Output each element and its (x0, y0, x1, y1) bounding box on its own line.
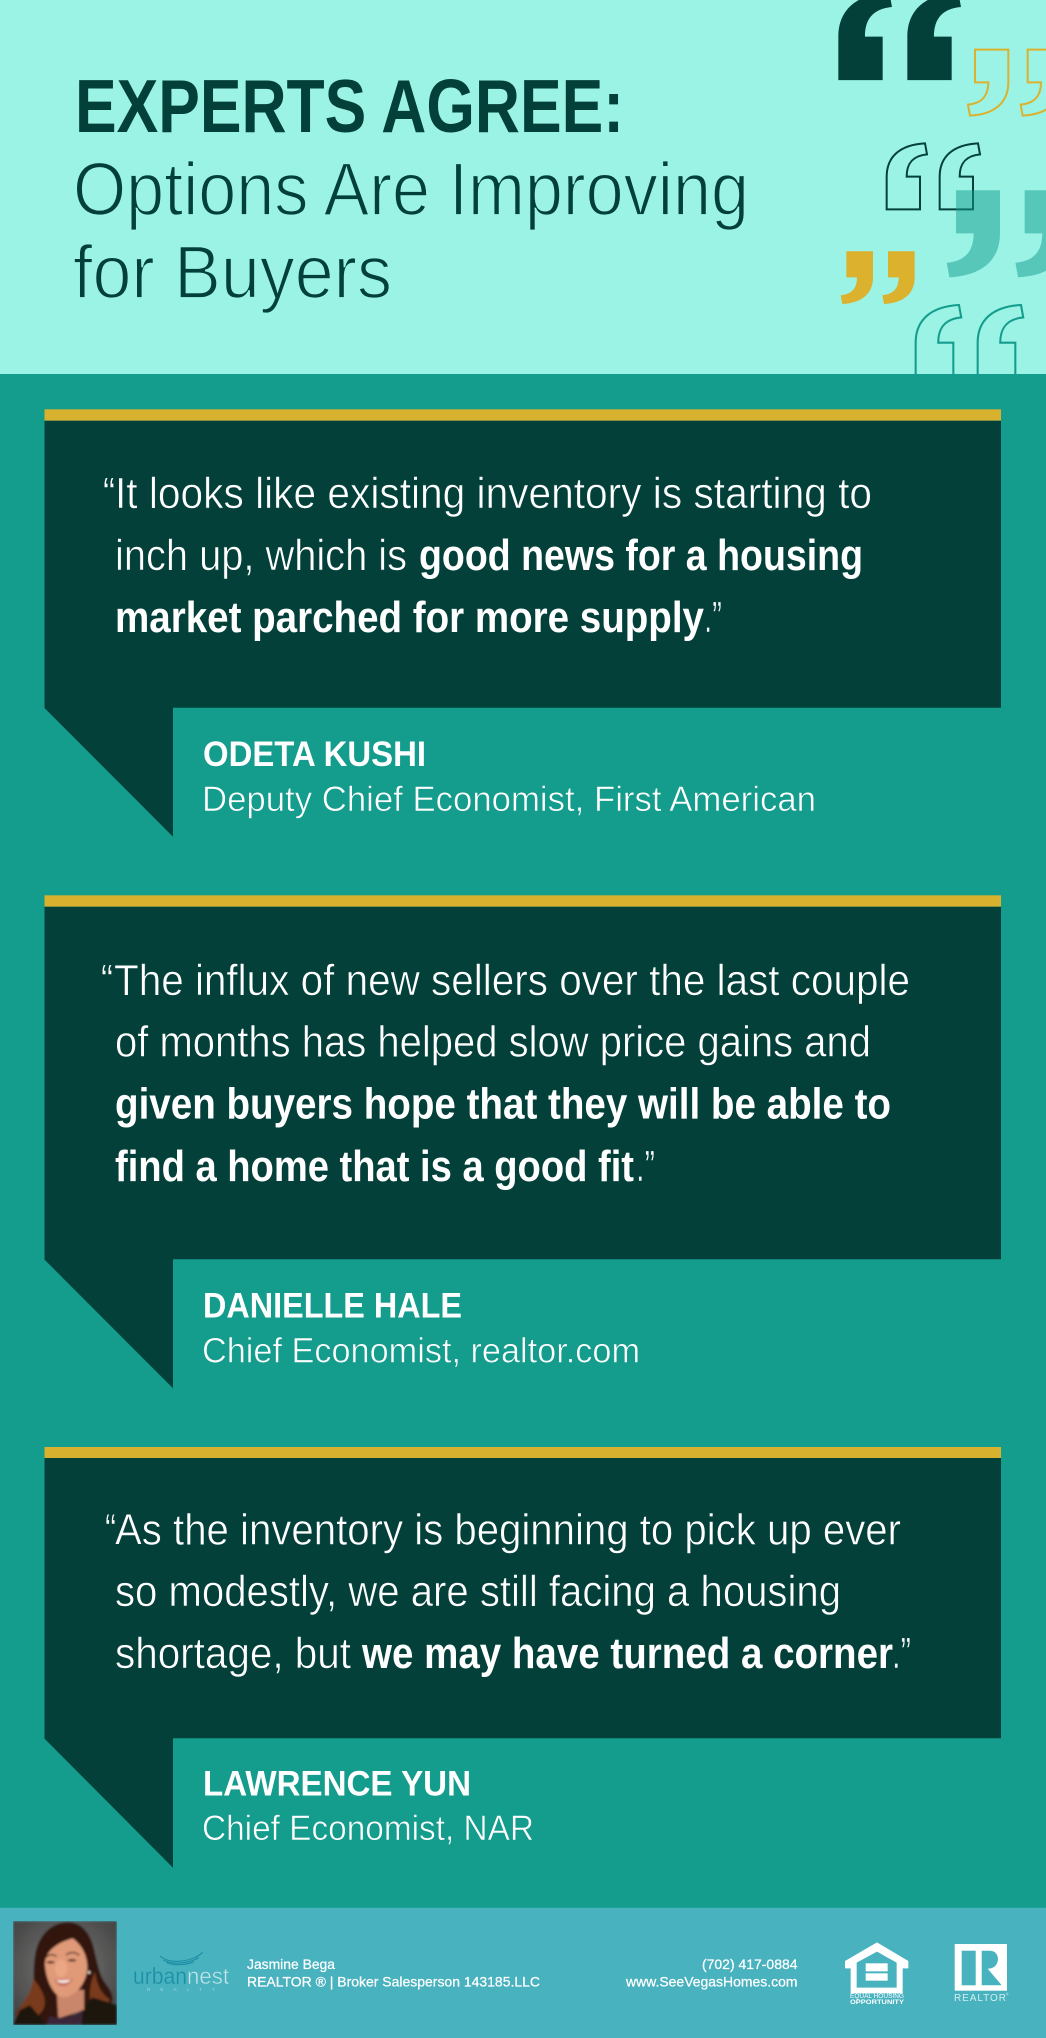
icon: teal translucent close quote (947, 190, 1046, 277)
panel: Lawrence Yun quote (44, 1447, 1001, 1868)
gold bar (44, 409, 1001, 421)
attribution: Deputy Chief Economist, First American (202, 780, 816, 819)
speech box (44, 907, 1001, 1388)
quote text: “ (101, 956, 113, 1005)
icon: dark outline open quote (887, 143, 980, 209)
quote text: we may have turned a corner (361, 1629, 893, 1678)
quote text: given buyers hope that they will be able to (115, 1080, 891, 1129)
panel: Odeta Kushi quote (44, 409, 1001, 837)
quote text (103, 469, 872, 642)
contact details (625, 1956, 798, 1990)
quote text: .” (892, 1629, 911, 1678)
logo: urbannest realty: nest (187, 1963, 230, 1989)
quote text: The influx of new sellers over the last couple (114, 956, 910, 1005)
title: Options Are Improving (73, 147, 749, 231)
quote text: It looks like existing inventory is starting to (115, 469, 872, 518)
title: EXPERTS AGREE: (75, 64, 624, 148)
footer (0, 1908, 1046, 2038)
quote text: of months has helped slow price gains and (115, 1018, 871, 1067)
icon: teal outline open quote (916, 305, 1023, 380)
icon: realtor R mark: REALTOR (954, 1993, 1006, 2004)
attribution: ODETA KUSHI (203, 735, 426, 774)
quote text: inch up, which is (115, 531, 407, 580)
contact details: www.SeeVegasHomes.com (625, 1974, 798, 1990)
quote text: “ (105, 1505, 116, 1554)
attribution: DANIELLE HALE (203, 1287, 462, 1326)
icon: gold solid close quote (841, 251, 915, 304)
attribution (202, 1765, 534, 1848)
quote text: shortage, but (115, 1629, 351, 1678)
icon: equal housing opportunity (845, 1942, 908, 2006)
speech box (44, 421, 1001, 837)
quote text: “ (103, 469, 115, 518)
quote text: .” (636, 1142, 655, 1191)
quote text: so modestly, we are still facing a housing (115, 1567, 841, 1616)
icon: realtor R mark: ® (1006, 1992, 1009, 1996)
quote text: find a home that is a good fit (115, 1142, 634, 1191)
header background (0, 0, 1046, 374)
icon: equal housing opportunity: EQUAL HOUSING (850, 1993, 904, 2000)
speech box (44, 1458, 1001, 1868)
icon: gold outline close quote (968, 50, 1046, 116)
attribution: Chief Economist, realtor.com (202, 1331, 640, 1370)
agent name and licence: REALTOR ® | Broker Salesperson 143185.LLC (247, 1974, 540, 1990)
contact details: (702) 417-0884 (702, 1956, 798, 1972)
agent name and licence: Jasmine Bega (247, 1956, 335, 1972)
attribution (202, 1287, 640, 1370)
attribution: Chief Economist, NAR (202, 1809, 534, 1848)
panel: Danielle Hale quote (44, 895, 1001, 1388)
agent photo (13, 1921, 117, 2025)
teal body background (0, 374, 1046, 1908)
attribution (202, 735, 816, 819)
decorative quotation marks (838, 0, 1046, 380)
title (73, 64, 749, 314)
quote text (101, 956, 910, 1191)
quote text: .” (704, 593, 722, 642)
attribution: LAWRENCE YUN (203, 1765, 471, 1804)
icon: realtor R mark (954, 1944, 1009, 2004)
gold bar (44, 1447, 1001, 1458)
quote text: good news for a housing (419, 531, 863, 580)
icon: dark solid open quote (838, 0, 961, 80)
logo: urbannest realty: urban (133, 1963, 187, 1989)
agent name and licence (247, 1956, 540, 1990)
quote text (105, 1505, 911, 1678)
logo: urbannest realty: REALTY (147, 1987, 215, 1992)
quote text: As the inventory is beginning to pick up ever (115, 1505, 901, 1554)
gold bar (44, 895, 1001, 907)
title: for Buyers (73, 230, 392, 314)
logo: urbannest realty (133, 1952, 230, 1992)
icon: equal housing opportunity: OPPORTUNITY (850, 1999, 905, 2006)
quote text: market parched for more supply (115, 593, 704, 642)
